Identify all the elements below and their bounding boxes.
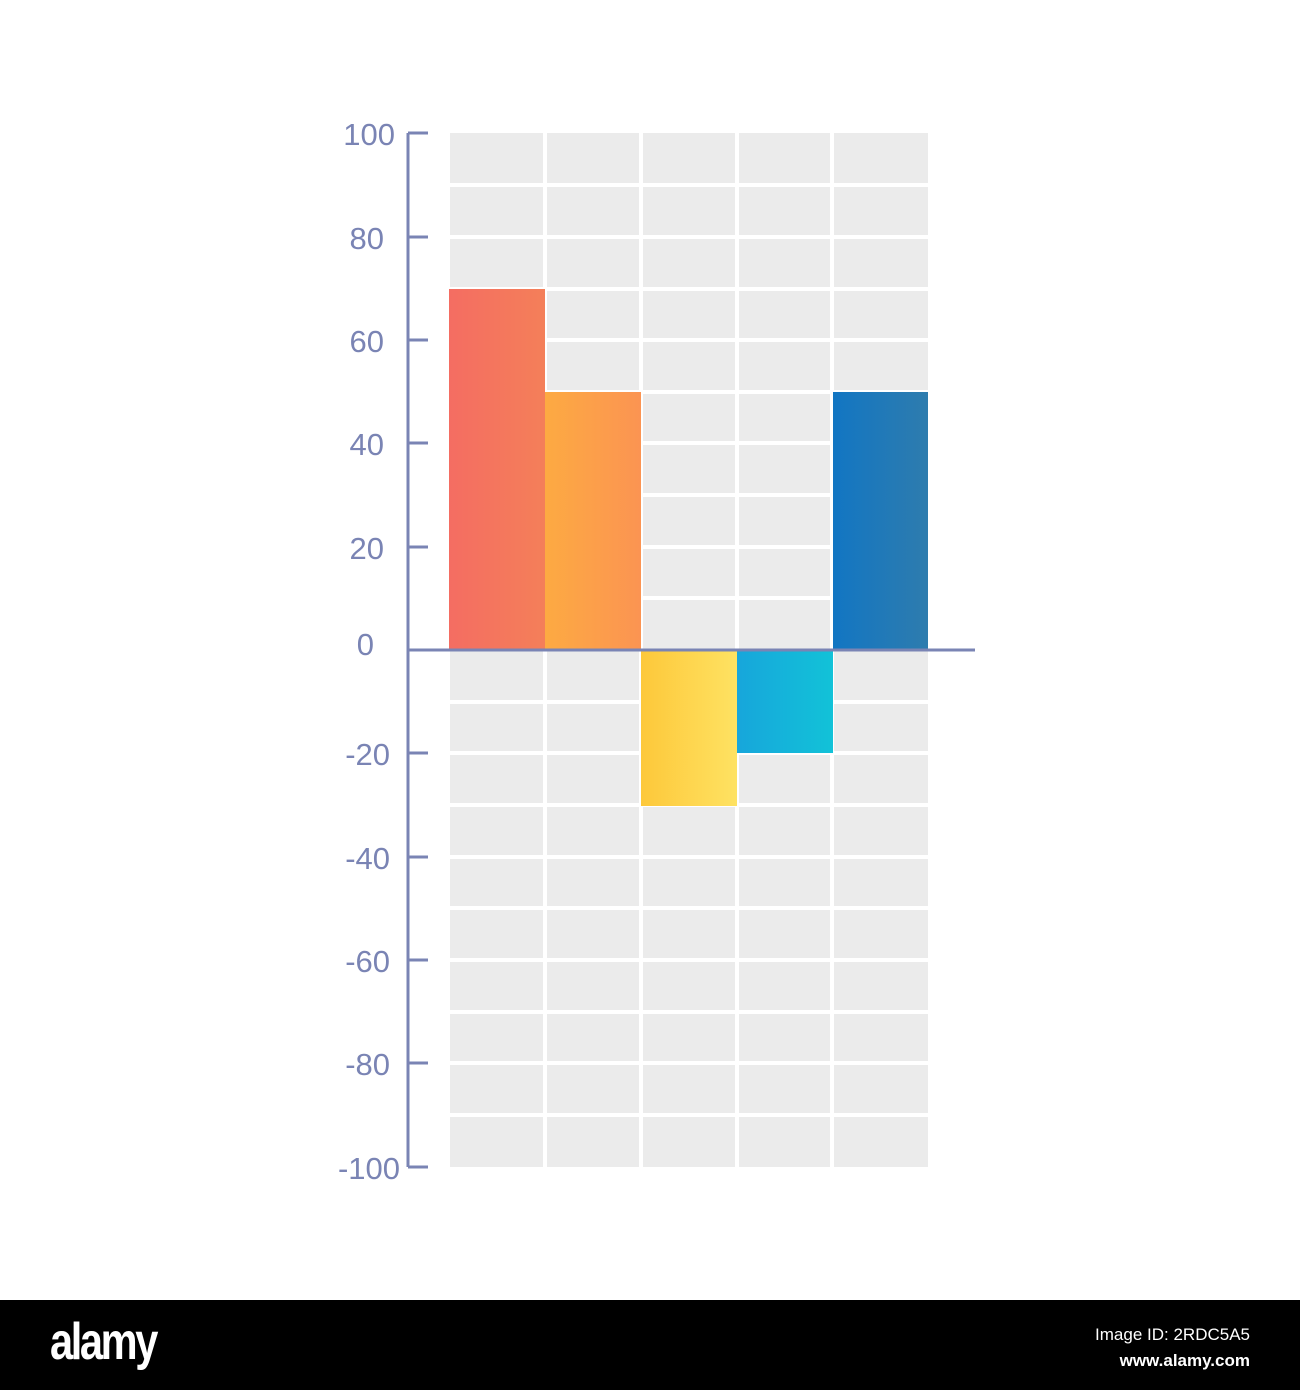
- y-axis labels: 20: [350, 531, 384, 566]
- y-axis labels: -100: [338, 1151, 400, 1186]
- axes: [408, 133, 975, 1167]
- footer id: Image ID: 2RDC5A5: [1095, 1325, 1250, 1344]
- y-axis labels: 0: [357, 627, 374, 662]
- y-axis labels: 100: [343, 117, 395, 152]
- bars: [449, 289, 928, 806]
- footer bar: [0, 1300, 1300, 1390]
- footer id: [1095, 1325, 1250, 1370]
- y-axis labels: 60: [350, 324, 384, 359]
- y-axis labels: 40: [350, 427, 384, 462]
- y-axis labels: [338, 117, 400, 1186]
- y-axis labels: -80: [345, 1047, 390, 1082]
- footer logo: alamy: [50, 1313, 156, 1371]
- footer id: www.alamy.com: [1120, 1351, 1250, 1370]
- y-axis labels: 80: [350, 221, 384, 256]
- y-axis labels: -20: [345, 737, 390, 772]
- y-axis labels: -60: [345, 944, 390, 979]
- grid background: [450, 133, 928, 1167]
- y-axis labels: -40: [345, 841, 390, 876]
